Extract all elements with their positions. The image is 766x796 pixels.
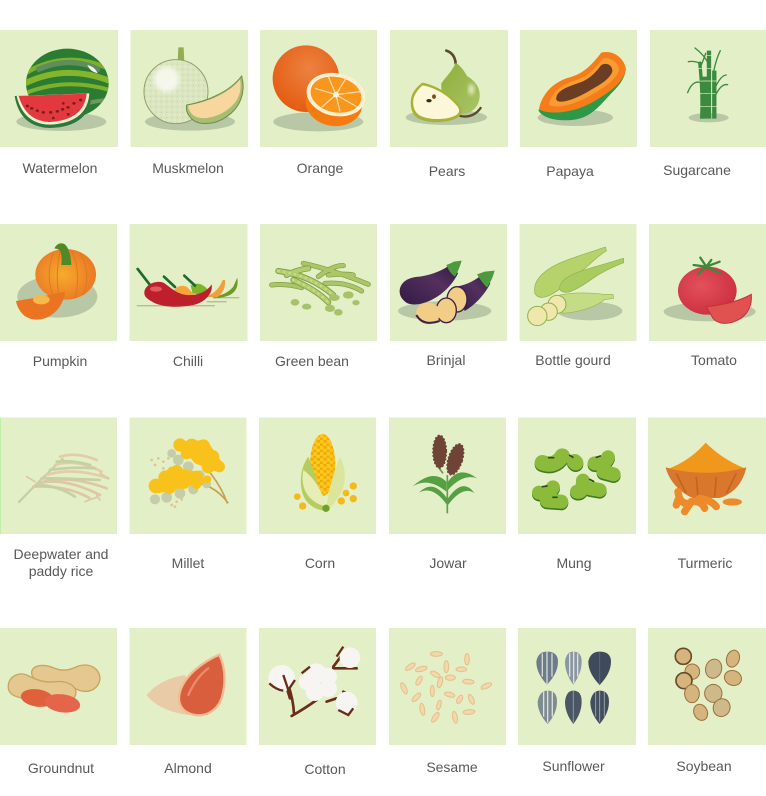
panel: Groundnut [0, 628, 117, 776]
panel: Jowar [389, 418, 506, 571]
label: Soybean: Soybean [676, 758, 732, 774]
background: Mung [518, 418, 636, 534]
background: Cotton [259, 628, 376, 745]
icon: cotton [268, 647, 360, 716]
icon: muskmelon [144, 47, 243, 131]
panel: Sugarcane [650, 30, 766, 178]
panel: Chilli [130, 224, 248, 369]
panel: Corn [259, 418, 376, 571]
background: Sugarcane [650, 30, 766, 147]
icon: pumpkin [16, 243, 97, 320]
background: Sesame [389, 628, 506, 745]
icon: green bean [272, 263, 368, 316]
label: Almond: Almond [164, 760, 212, 776]
icon: papaya [538, 52, 626, 126]
label: Pumpkin: Pumpkin [33, 353, 87, 369]
icon: millet [149, 438, 228, 508]
label: Papaya: Papaya [546, 163, 594, 179]
panel: Almond [130, 628, 246, 776]
label: Corn: Corn [305, 555, 335, 571]
icon: corn [294, 434, 357, 512]
background: Jowar [389, 418, 506, 534]
panel: Sunflower [518, 628, 636, 774]
icon: mung [539, 455, 614, 503]
icon: jowar [412, 435, 477, 513]
panel: Soybean [648, 628, 766, 774]
panel: Sesame [389, 628, 506, 775]
background: Chilli [130, 224, 248, 341]
icon: turmeric [666, 443, 746, 512]
label: Sunflower: Sunflower [542, 758, 605, 774]
panel: Millet [130, 418, 246, 571]
icon: watermelon [15, 49, 112, 131]
background: Green bean [260, 224, 377, 341]
panel: Pears [390, 30, 508, 179]
icon: orange [273, 45, 369, 131]
background: Turmeric [648, 418, 766, 534]
background: Groundnut [0, 628, 117, 745]
panel: Watermelon [0, 30, 118, 176]
icon: tomato [664, 258, 756, 323]
background: Orange [260, 30, 377, 147]
label: Tomato: Tomato [691, 352, 737, 368]
label: Brinjal: Brinjal [427, 352, 465, 368]
icon: rice [18, 455, 108, 503]
background: Watermelon [0, 30, 118, 147]
icon: sugarcane [688, 48, 729, 122]
background: Corn [259, 418, 376, 534]
background: Brinjal [390, 224, 507, 341]
panel: Pumpkin [0, 224, 117, 369]
background: Soybean [648, 628, 766, 745]
background: Almond [130, 628, 246, 745]
icon: bottle gourd [528, 247, 624, 326]
panel: Turmeric [648, 418, 766, 571]
panel: Orange [260, 30, 377, 176]
label: Chilli: Chilli [173, 353, 203, 369]
icon: pears [406, 51, 487, 125]
label: Sesame: Sesame [426, 759, 478, 775]
label: Pears: Pears [429, 163, 465, 179]
icon: chilli [137, 269, 239, 307]
background: Muskmelon [130, 30, 248, 147]
label: Millet: Millet [172, 555, 204, 571]
panel: Bottle gourd [520, 224, 636, 368]
label: Bottle gourd: Bottle gourd [535, 352, 611, 368]
label: Jowar: Jowar [429, 555, 467, 571]
background: Deepwater and paddy rice [0, 418, 117, 534]
background: Bottle gourd [520, 224, 636, 341]
panel: Deepwater and paddy rice [0, 418, 117, 579]
background: Millet [130, 418, 246, 534]
label: Watermelon: Watermelon [23, 160, 97, 176]
label: Groundnut: Groundnut [28, 760, 94, 776]
icon: brinjal [398, 261, 495, 324]
icon: almond [147, 655, 224, 715]
panel: Muskmelon [130, 30, 248, 176]
label: Sugarcane: Sugarcane [663, 162, 731, 178]
label: Green bean: Green bean [275, 353, 349, 369]
background: Pears [390, 30, 508, 147]
icon: groundnut [8, 665, 100, 715]
panel: Cotton [259, 628, 376, 777]
decorative edge [0, 418, 1, 534]
panel: Papaya [520, 30, 637, 179]
label: Deepwater and paddy rice: paddy rice [29, 563, 94, 579]
icon: soybean [675, 648, 744, 723]
panel: Green bean [260, 224, 377, 369]
label: Cotton: Cotton [304, 761, 346, 777]
panel: Tomato [649, 224, 766, 368]
background: Tomato [649, 224, 766, 341]
panel: Mung [518, 418, 636, 571]
label: Mung: Mung [556, 555, 592, 571]
panel: Brinjal [390, 224, 507, 368]
background: Pumpkin [0, 224, 117, 341]
icon: sesame [399, 652, 492, 724]
label: Turmeric: Turmeric [678, 555, 732, 571]
background: Papaya [520, 30, 637, 147]
label: Orange: Orange [297, 160, 344, 176]
label: Deepwater and paddy rice: Deepwater and [14, 546, 108, 562]
label: Muskmelon: Muskmelon [152, 160, 224, 176]
background: Sunflower [518, 628, 636, 745]
icon: sunflower [536, 652, 611, 724]
